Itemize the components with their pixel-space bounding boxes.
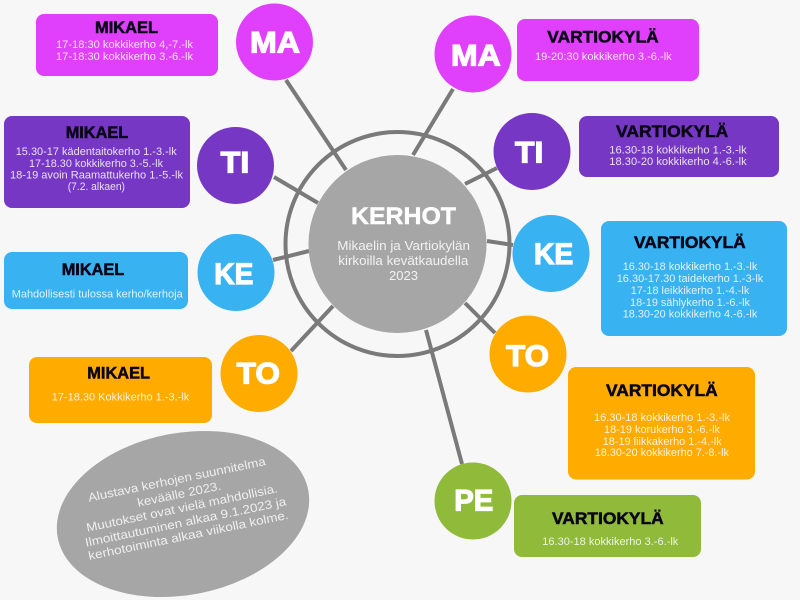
badge: MA right: MA [451, 40, 501, 73]
panel: Vartiokylä Wednesday: 17-18 leikkikerho 1.-4.-lk [631, 285, 750, 297]
panel: Vartiokylä Thursday [568, 367, 755, 480]
panel: Vartiokylä Thursday: 16.30-18 kokkikerho 1.-3.-lk [594, 412, 730, 424]
panel: Mikael Wednesday [4, 252, 188, 309]
panel: Vartiokylä Friday: 16.30-18 kokkikerho 3.-6.-lk [542, 536, 679, 548]
panel: Mikael Tuesday: MIKAEL [66, 124, 128, 142]
callout: preliminary plan note: Muutokset ovat vielä mahdollisia. [85, 481, 279, 535]
badge: KE right: KE [534, 238, 573, 271]
badge: TI left: TI [221, 147, 249, 180]
badge: TO right: TO [506, 340, 549, 373]
callout: preliminary plan note [43, 411, 323, 600]
connector lines [273, 80, 513, 464]
panel: Vartiokylä Wednesday [601, 221, 787, 336]
panel: Vartiokylä Monday [517, 19, 699, 81]
panel: Vartiokylä Thursday: VARTIOKYLÄ [606, 382, 718, 400]
badge: TO left [220, 335, 298, 412]
badge: KE left [198, 234, 274, 311]
panel: Vartiokylä Wednesday: 16.30-17.30 taidekerho 1.-3-lk [617, 273, 764, 285]
panel: Mikael Monday: 17-18:30 kokkikerho 4,-7.-lk [56, 39, 194, 51]
badge: PE: PE [454, 485, 493, 518]
panel: Mikael Tuesday [4, 116, 190, 208]
callout: preliminary plan note: keväälle 2023. [136, 479, 222, 510]
central hub: KERHOT [308, 155, 486, 333]
callout: preliminary plan note: Ilmoittautuminen alkaa 9.1.2023 ja [84, 494, 288, 550]
panel: Mikael Thursday: 17-18.30 Kokkikerho 1.-3.-lk [52, 392, 190, 404]
hub subtitle [337, 239, 470, 283]
panel: Mikael Monday [36, 14, 218, 76]
hub title: KERHOT [351, 203, 456, 230]
panel: Vartiokylä Wednesday: VARTIOKYLÄ [634, 234, 746, 252]
badge: MA left [236, 4, 313, 80]
panel: Mikael Tuesday: 15.30-17 kädentaitokerho 1.-3.-lk [16, 146, 177, 158]
callout: preliminary plan note: kerhotoiminta alkaa viikolla kolme. [87, 508, 290, 563]
panel: Vartiokylä Thursday: 18-19 korukerho 3.-6.-lk [604, 424, 720, 436]
badge: KE right [512, 215, 590, 292]
panel: Vartiokylä Wednesday: 16.30-18 kokkikerho 1.-3.-lk [623, 261, 758, 273]
panel: Vartiokylä Wednesday: 18.30-20 kokkikerho 4.-6.-lk [623, 308, 758, 320]
outer ring [286, 132, 510, 356]
panel: Mikael Tuesday: (7.2. alkaen) [68, 181, 125, 193]
panel: Vartiokylä Monday: 19-20:30 kokkikerho 3.-6.-lk [535, 51, 672, 63]
badge: MA left: MA [250, 27, 300, 60]
hub subtitle: kirkoilla kevätkaudella [338, 254, 468, 268]
panel: Vartiokylä Tuesday: 16.30-18 kokkikerho 1.-3.-lk [609, 144, 747, 156]
badge: MA right [434, 16, 512, 92]
panel: Vartiokylä Friday: VARTIOKYLÄ [552, 510, 664, 528]
badge: TI left [197, 127, 274, 204]
panel: Vartiokylä Thursday: 18-19 liikkakerho 1.-4.-lk [603, 436, 722, 448]
panel: Mikael Thursday: MIKAEL [87, 365, 150, 383]
callout: preliminary plan note: Alustava kerhojen suunnitelma [87, 454, 267, 505]
badge: TI right: TI [515, 137, 543, 170]
panel: Mikael Thursday [29, 357, 212, 423]
panel: Mikael Monday: MIKAEL [95, 19, 158, 37]
hub subtitle: 2023 [389, 269, 418, 283]
panel: Mikael Monday: 17-18:30 kokkikerho 3.-6.-lk [56, 51, 194, 63]
badge: KE left: KE [214, 258, 253, 291]
panel: Vartiokylä Friday [514, 495, 701, 557]
panel: Vartiokylä Thursday: 18.30-20 kokkikerho 7.-8.-lk [595, 447, 729, 459]
panel: Vartiokylä Monday: VARTIOKYLÄ [547, 29, 659, 47]
badge: TO right [490, 316, 566, 392]
badge: TI right [494, 113, 570, 190]
panel: Mikael Tuesday: 17-18.30 kokkikerho 3.-5.-lk [29, 158, 163, 170]
panel: Vartiokylä Tuesday [579, 116, 779, 177]
panel: Mikael Wednesday: Mahdollisesti tulossa kerho/kerhoja [12, 289, 184, 301]
panel: Vartiokylä Tuesday: 18.30-20 kokkikerho 4.-6.-lk [609, 156, 747, 168]
panel: Vartiokylä Tuesday: VARTIOKYLÄ [616, 123, 728, 141]
badge: TO left: TO [237, 357, 280, 390]
panel: Mikael Tuesday: 18-19 avoin Raamattukerho 1.-5.-lk [10, 170, 183, 182]
panel: Mikael Wednesday: MIKAEL [62, 261, 124, 279]
hub subtitle: Mikaelin ja Vartiokylän [337, 239, 470, 253]
panel: Vartiokylä Wednesday: 18-19 sählykerho 1.-6.-lk [630, 297, 750, 309]
badge: PE [434, 462, 512, 540]
